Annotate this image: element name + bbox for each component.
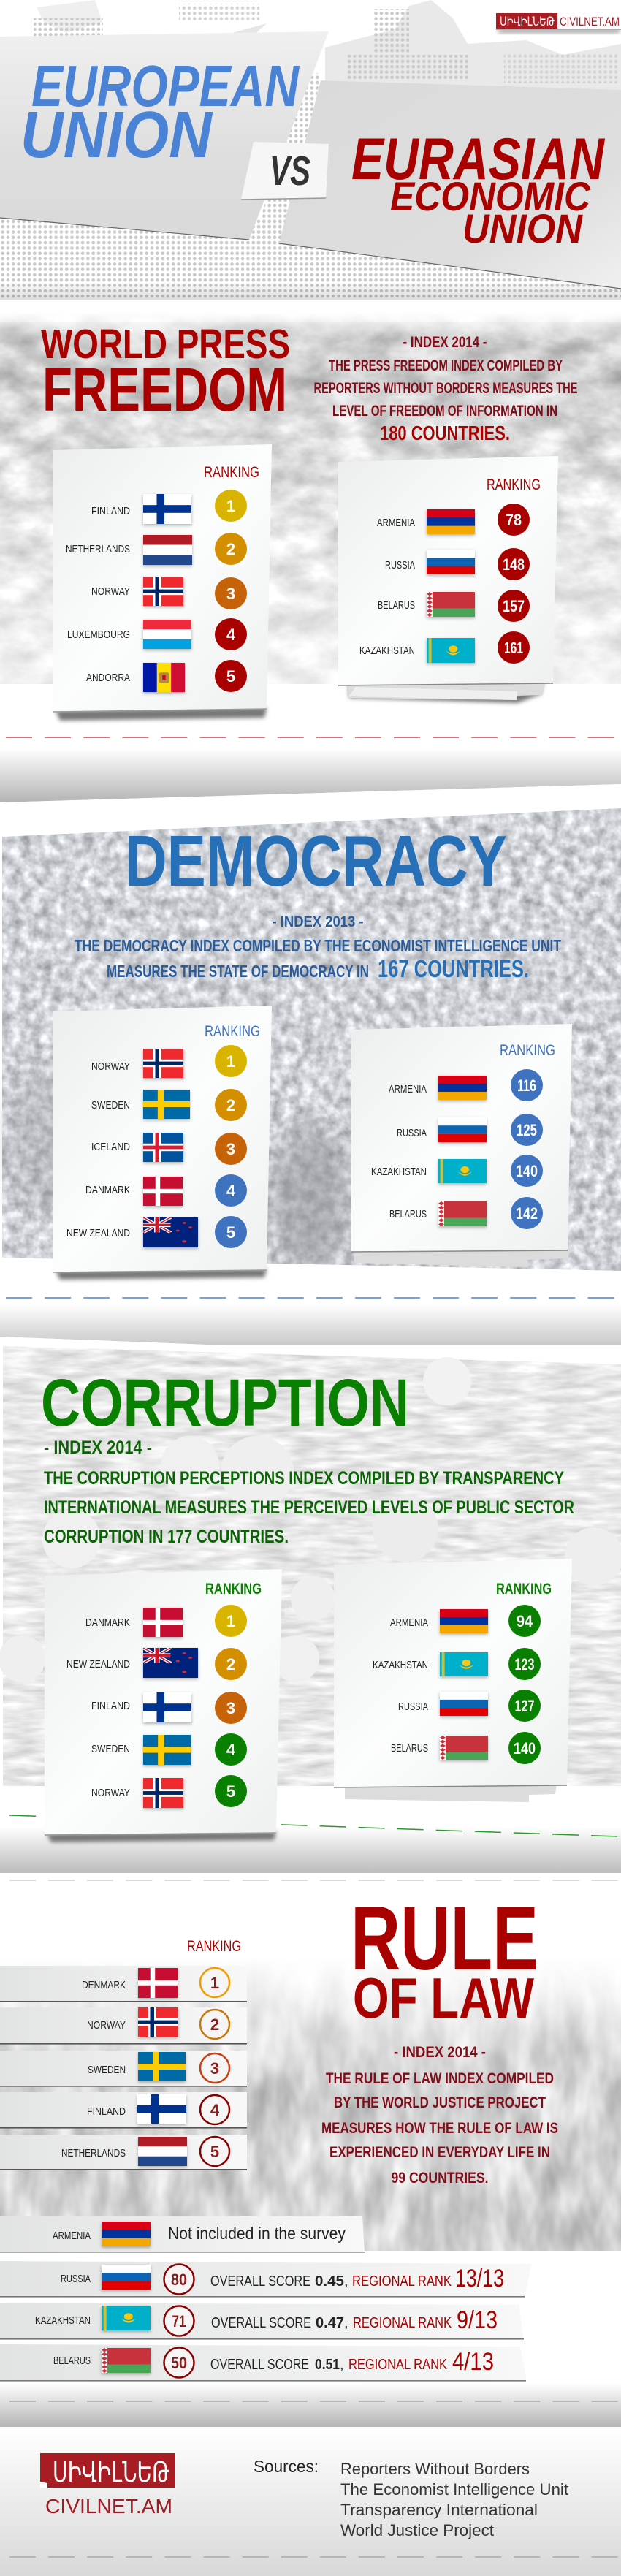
strip: Russia bbox=[0, 2261, 532, 2298]
strip: Russia: OVERALL SCORE bbox=[210, 2273, 310, 2290]
logo: footer bbox=[40, 2453, 175, 2518]
shadow band after democracy section bbox=[0, 1304, 621, 1361]
heading: Corruption: CORRUPTION bbox=[41, 1366, 409, 1440]
header: right panel bbox=[279, 80, 621, 289]
row: Andorra: 5 bbox=[226, 667, 235, 685]
divider: red dashes bbox=[6, 737, 621, 738]
row: Kazakhstan: KAZAKHSTAN bbox=[359, 645, 415, 657]
row: Sweden: 4 bbox=[226, 1741, 236, 1759]
text: corruption description: - INDEX 2014 - bbox=[44, 1437, 152, 1458]
strip: Belarus: 0.51 bbox=[315, 2357, 340, 2373]
strip: Kazakhstan: KAZAKHSTAN bbox=[35, 2314, 91, 2327]
row: Belarus: BELARUS bbox=[378, 599, 415, 612]
row: New Zealand: 2 bbox=[226, 1655, 235, 1673]
text: democracy description: MEASURES THE STATE OF DEMOCRACY IN bbox=[107, 962, 369, 981]
text: rule of law description: EXPERIENCED IN EVERYDAY LIFE IN bbox=[329, 2144, 550, 2161]
row: Sweden: SWEDEN bbox=[91, 1743, 130, 1755]
row: Danmark: DANMARK bbox=[85, 1616, 130, 1629]
text: sources list: Reporters Without Borders bbox=[340, 2460, 530, 2478]
row: Finland: FINLAND bbox=[91, 505, 130, 517]
strip: Kazakhstan: 9/13 bbox=[457, 2306, 498, 2334]
text: democracy description: 167 COUNTRIES. bbox=[378, 955, 529, 982]
strip: Sweden: SWEDEN bbox=[88, 2064, 126, 2076]
text: rule of law description bbox=[321, 2044, 558, 2186]
row: New Zealand: 5 bbox=[226, 1223, 235, 1242]
strip: Denmark: DENMARK bbox=[82, 1979, 126, 1991]
row: Russia bbox=[398, 1690, 541, 1722]
strip: Russia: , bbox=[344, 2273, 348, 2290]
text: press freedom description: - INDEX 2014 - bbox=[403, 334, 487, 351]
row: Russia bbox=[385, 548, 530, 580]
heading: Democracy: DEMOCRACY bbox=[125, 821, 507, 901]
panel: press freedom EU ranking bbox=[53, 444, 272, 721]
panel: press freedom EU ranking: RANKING bbox=[204, 464, 259, 481]
divider: green dashes bbox=[9, 1815, 618, 1836]
row: Armenia: ARMENIA bbox=[390, 1616, 428, 1629]
strip: Belarus: REGIONAL RANK bbox=[348, 2357, 448, 2373]
row: Sweden bbox=[91, 1089, 247, 1121]
row: Armenia: 78 bbox=[506, 511, 522, 529]
shadow band before footer bbox=[0, 2383, 621, 2427]
row: Belarus bbox=[378, 590, 530, 622]
logo: top right bbox=[496, 13, 621, 33]
strip: Kazakhstan: OVERALL SCORE bbox=[211, 2315, 311, 2331]
row: Luxembourg bbox=[67, 618, 247, 650]
row: Kazakhstan bbox=[359, 631, 530, 664]
row: Finland: 3 bbox=[226, 1699, 235, 1717]
divider: gray dashes bbox=[9, 2556, 621, 2558]
row: Sweden: SWEDEN bbox=[91, 1099, 130, 1112]
strip: Sweden bbox=[0, 2051, 247, 2087]
row: Armenia: 116 bbox=[517, 1076, 536, 1095]
strip: Kazakhstan: 0.47 bbox=[316, 2315, 344, 2331]
strip: Finland bbox=[0, 2092, 247, 2129]
strip: Kazakhstan bbox=[0, 2303, 524, 2340]
row: Finland bbox=[91, 1692, 247, 1724]
panel: corruption EAEU ranking bbox=[334, 1559, 572, 1802]
row: Luxembourg: LUXEMBOURG bbox=[67, 628, 130, 641]
strip: Sweden: 3 bbox=[210, 2059, 219, 2078]
background: democracy crowd photo bbox=[0, 784, 621, 1305]
row: Netherlands bbox=[66, 533, 247, 565]
row: Danmark bbox=[85, 1605, 247, 1637]
row: Kazakhstan: 161 bbox=[504, 639, 523, 657]
strip: Kazakhstan: REGIONAL RANK bbox=[353, 2315, 452, 2331]
text: sources list: World Justice Project bbox=[340, 2521, 494, 2539]
background: press photo bbox=[0, 312, 621, 748]
strip: Russia: RUSSIA bbox=[61, 2273, 91, 2285]
vs badge: VS bbox=[270, 148, 310, 194]
row: Finland: 1 bbox=[226, 497, 235, 515]
row: Belarus: 140 bbox=[514, 1739, 536, 1758]
text: rule of law description: MEASURES HOW THE RULE OF LAW IS bbox=[321, 2120, 558, 2137]
row: Finland: FINLAND bbox=[91, 1700, 130, 1712]
row: Norway bbox=[91, 1775, 247, 1808]
row: Belarus: 142 bbox=[516, 1204, 538, 1223]
row: Russia: 125 bbox=[517, 1121, 537, 1139]
row: Russia: RUSSIA bbox=[385, 559, 415, 571]
row: Finland bbox=[91, 490, 247, 524]
row: New Zealand: NEW ZEALAND bbox=[66, 1658, 130, 1671]
heading: World Press Freedom: FREEDOM bbox=[42, 355, 287, 424]
text: corruption description: CORRUPTION IN 177 COUNTRIES. bbox=[44, 1527, 289, 1547]
strip: Russia: 0.45 bbox=[315, 2273, 344, 2290]
panel: press freedom EAEU ranking: RANKING bbox=[487, 476, 541, 493]
row: Netherlands: 2 bbox=[226, 540, 235, 558]
text: sources list: The Economist Intelligence Unit bbox=[340, 2480, 568, 2499]
row: Kazakhstan: KAZAKHSTAN bbox=[373, 1659, 428, 1671]
row: Luxembourg: 4 bbox=[226, 626, 236, 644]
divider: blue dashes bbox=[6, 1297, 621, 1299]
text: sources list: Transparency International bbox=[340, 2501, 538, 2519]
strip: Armenia: ARMENIA bbox=[53, 2230, 91, 2242]
panel: corruption EAEU ranking: RANKING bbox=[496, 1581, 552, 1597]
strip: Kazakhstan: , bbox=[344, 2315, 348, 2331]
strip: Armenia bbox=[0, 2216, 365, 2253]
strip: Armenia: Not included in the survey bbox=[168, 2224, 346, 2243]
row: New Zealand: NEW ZEALAND bbox=[66, 1227, 130, 1239]
strip: Finland: FINLAND bbox=[87, 2105, 126, 2118]
text: rule of law description: THE RULE OF LAW INDEX COMPILED bbox=[326, 2070, 554, 2087]
shadow band after press section bbox=[0, 748, 621, 802]
row: Belarus bbox=[389, 1197, 543, 1229]
row: New Zealand bbox=[66, 1648, 247, 1680]
strip: Russia: 80 bbox=[171, 2271, 187, 2289]
title: European Union: EUROPEAN bbox=[31, 53, 300, 118]
heading: Rule of Law: OF LAW bbox=[353, 1966, 534, 2030]
row: Russia: 127 bbox=[514, 1697, 535, 1715]
text: democracy description bbox=[75, 913, 561, 982]
heading: World Press Freedom: WORLD PRESS bbox=[41, 321, 290, 368]
row: Belarus: 157 bbox=[503, 597, 525, 615]
row: Norway bbox=[91, 1045, 247, 1078]
row: Norway bbox=[91, 577, 247, 609]
row: Armenia bbox=[390, 1605, 541, 1637]
strip: Belarus: 4/13 bbox=[452, 2348, 494, 2376]
heading: Rule of Law bbox=[351, 1889, 538, 2030]
row: New Zealand bbox=[66, 1216, 247, 1248]
title: Eurasian Economic Union: UNION bbox=[462, 205, 583, 251]
row: Iceland bbox=[91, 1133, 247, 1165]
row: Danmark bbox=[85, 1174, 247, 1207]
background: rule of law photo bbox=[0, 1891, 621, 2390]
text: corruption description bbox=[44, 1437, 574, 1547]
row: Kazakhstan: 140 bbox=[516, 1162, 538, 1180]
strip: Russia: 13/13 bbox=[455, 2265, 504, 2292]
panel: corruption EU ranking: RANKING bbox=[205, 1581, 262, 1597]
divider: gray dashes bbox=[9, 2401, 621, 2402]
text: sources list bbox=[340, 2460, 568, 2539]
heading: Rule of Law: RULE bbox=[351, 1889, 538, 1989]
row: Russia: RUSSIA bbox=[397, 1127, 427, 1139]
strip: Finland: 4 bbox=[210, 2101, 220, 2119]
strip: Kazakhstan: 71 bbox=[172, 2312, 186, 2330]
panel: democracy EAEU ranking: RANKING bbox=[500, 1042, 555, 1059]
row: Danmark: 4 bbox=[226, 1182, 236, 1200]
strip: Norway bbox=[0, 2007, 247, 2045]
vs badge bbox=[241, 142, 329, 200]
strip: Netherlands: 5 bbox=[210, 2143, 219, 2161]
text: rule of law description: BY THE WORLD JUSTICE PROJECT bbox=[334, 2094, 546, 2111]
text: sources label: Sources: bbox=[254, 2457, 319, 2476]
strip: Belarus: BELARUS bbox=[53, 2355, 91, 2367]
shadow band after corruption section bbox=[0, 1827, 621, 1873]
row: Sweden: 2 bbox=[226, 1096, 235, 1114]
logo: footer: ՍԻՎԻԼՆԵԹ bbox=[53, 2458, 169, 2488]
text: democracy description: - INDEX 2013 - bbox=[272, 913, 364, 930]
row: Netherlands: NETHERLANDS bbox=[66, 543, 130, 555]
divider: gray dashes bbox=[9, 1880, 621, 1881]
header: world map background bbox=[0, 0, 621, 314]
logo: footer: CIVILNET.AM bbox=[45, 2495, 172, 2518]
strip: Netherlands: NETHERLANDS bbox=[61, 2147, 126, 2159]
strip: Belarus: 50 bbox=[171, 2354, 187, 2372]
row: Norway: NORWAY bbox=[91, 1787, 130, 1799]
row: Armenia: ARMENIA bbox=[389, 1083, 427, 1095]
row: Armenia: 94 bbox=[517, 1612, 533, 1630]
text: press freedom description bbox=[314, 334, 577, 444]
strip: Denmark bbox=[0, 1966, 247, 2002]
text: rule of law description: 99 COUNTRIES. bbox=[392, 2170, 488, 2186]
row: Andorra bbox=[86, 660, 247, 692]
row: Armenia bbox=[389, 1069, 543, 1101]
row: Kazakhstan: KAZAKHSTAN bbox=[371, 1166, 427, 1178]
header: left panel bbox=[0, 31, 329, 240]
row: Danmark: 1 bbox=[226, 1612, 235, 1630]
heading: World Press Freedom bbox=[41, 321, 290, 424]
title: Eurasian Economic Union: ECONOMIC bbox=[390, 173, 591, 219]
panel: corruption EU ranking bbox=[45, 1569, 282, 1842]
footer background bbox=[0, 2427, 621, 2576]
panel: press freedom EAEU ranking bbox=[338, 456, 558, 703]
title: European Union: UNION bbox=[20, 99, 213, 172]
title: European Union bbox=[20, 53, 300, 172]
row: Kazakhstan bbox=[373, 1648, 541, 1680]
row: Iceland: 3 bbox=[226, 1140, 235, 1158]
row: Armenia: ARMENIA bbox=[377, 517, 415, 529]
strip: Denmark: 1 bbox=[210, 1974, 219, 1992]
row: Norway: NORWAY bbox=[91, 1060, 130, 1073]
row: Russia: RUSSIA bbox=[398, 1701, 428, 1713]
panel: democracy EU ranking bbox=[53, 1006, 272, 1280]
row: Armenia bbox=[377, 504, 530, 536]
text: rule of law description: - INDEX 2014 - bbox=[394, 2044, 486, 2061]
row: Russia bbox=[397, 1114, 543, 1146]
label: ranking: RANKING bbox=[187, 1938, 241, 1955]
strip: Belarus: , bbox=[340, 2357, 344, 2373]
row: Norway: 5 bbox=[226, 1782, 235, 1801]
title: Eurasian Economic Union bbox=[351, 126, 605, 251]
row: Belarus bbox=[391, 1732, 541, 1764]
row: Danmark: DANMARK bbox=[85, 1184, 130, 1196]
row: Belarus: BELARUS bbox=[391, 1742, 428, 1755]
row: Norway: 1 bbox=[226, 1052, 235, 1071]
strip: Russia: REGIONAL RANK bbox=[352, 2273, 452, 2290]
panel: democracy EU ranking: RANKING bbox=[205, 1023, 260, 1040]
strip: Belarus bbox=[0, 2344, 527, 2382]
row: Andorra: ANDORRA bbox=[86, 672, 130, 684]
row: Norway: NORWAY bbox=[91, 585, 130, 598]
row: Belarus: BELARUS bbox=[389, 1208, 427, 1220]
strip: Norway: 2 bbox=[210, 2015, 219, 2034]
row: Sweden bbox=[91, 1733, 247, 1766]
strip: Belarus: OVERALL SCORE bbox=[210, 2357, 309, 2373]
row: Kazakhstan bbox=[371, 1155, 543, 1187]
background: corruption coins photo bbox=[0, 1337, 621, 1786]
logo: top right: ՍԻՎԻԼՆԵԹ bbox=[500, 15, 555, 29]
strip: Norway: NORWAY bbox=[87, 2019, 126, 2032]
row: Norway: 3 bbox=[226, 585, 235, 603]
row: Russia: 148 bbox=[503, 555, 525, 574]
panel: democracy EAEU ranking bbox=[351, 1024, 572, 1267]
strip: Netherlands bbox=[0, 2135, 247, 2170]
row: Kazakhstan: 123 bbox=[514, 1655, 535, 1673]
row: Iceland: ICELAND bbox=[91, 1141, 130, 1153]
text: press freedom description: 180 COUNTRIES. bbox=[380, 422, 510, 444]
